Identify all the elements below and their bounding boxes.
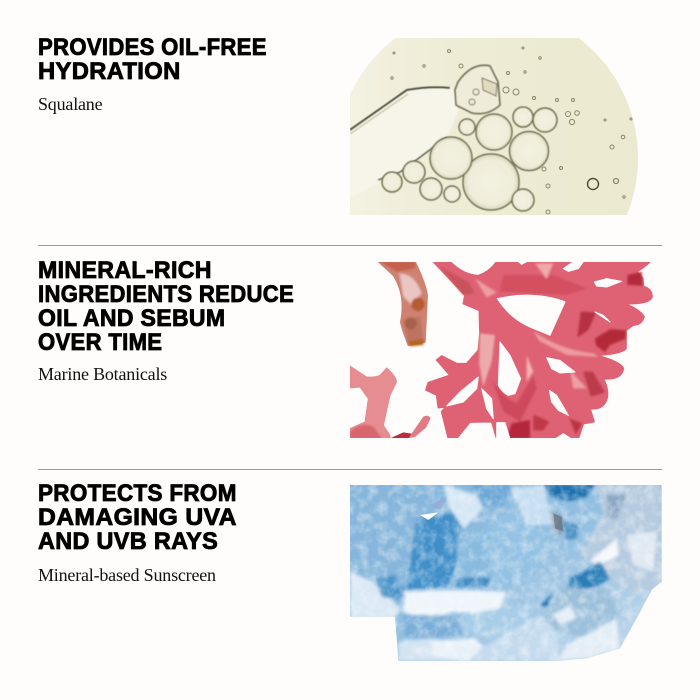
- heading: DAMAGING UVA: [38, 504, 237, 531]
- heading: MINERAL-RICH: [38, 257, 212, 284]
- image: blue mineral crystal: [350, 484, 662, 661]
- ingredient label: Marine Botanicals: [38, 364, 167, 384]
- image: oil bubbles and dropper: [350, 38, 638, 215]
- heading: PROTECTS FROM: [38, 480, 237, 507]
- droplets: [391, 47, 632, 214]
- oil disc: [350, 38, 638, 215]
- heading: OIL AND SEBUM: [38, 305, 225, 332]
- heading: AND UVB RAYS: [38, 528, 218, 555]
- heading: [38, 257, 294, 356]
- seaweed main frond: [426, 262, 652, 438]
- image: red seaweed: [350, 262, 652, 439]
- crystal facets: [350, 484, 662, 661]
- text block: UVA and UVB protection: [38, 480, 237, 585]
- seaweed fragment: lower left: [350, 366, 431, 439]
- heading: OVER TIME: [38, 329, 162, 356]
- crystal body: [350, 484, 662, 661]
- heading: [38, 480, 237, 555]
- heading: [38, 34, 267, 85]
- heading: HYDRATION: [38, 58, 181, 85]
- dropper: [350, 65, 500, 198]
- seaweed holes: [447, 262, 622, 439]
- bubbles: [382, 107, 557, 211]
- seaweed fragment: top brown: [378, 262, 427, 346]
- heading: PROVIDES OIL-FREE: [38, 34, 267, 61]
- text block: mineral-rich ingredients: [38, 257, 294, 384]
- heading: INGREDIENTS REDUCE: [38, 281, 294, 308]
- text block: oil-free hydration: [38, 34, 267, 114]
- ingredient label: Mineral-based Sunscreen: [38, 565, 216, 585]
- ingredient label: Squalane: [38, 94, 102, 114]
